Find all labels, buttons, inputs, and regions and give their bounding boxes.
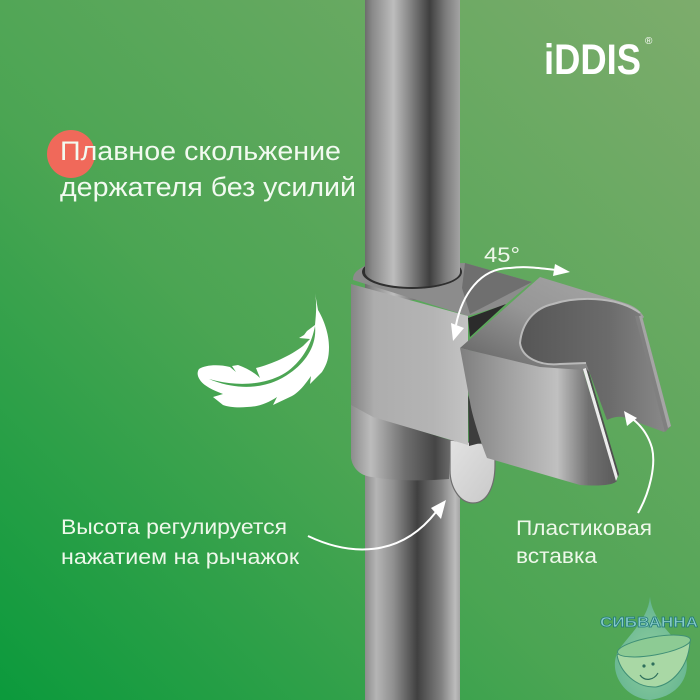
lower collar <box>351 400 450 480</box>
water drop <box>615 597 687 700</box>
heading with red accent circle: держателя без усилий <box>60 172 356 202</box>
holder opening inner wall <box>520 299 668 432</box>
lever <box>450 440 495 503</box>
arrow: to plastic insert <box>624 411 653 513</box>
label: height adjustment: нажатием на рычажок <box>61 545 300 569</box>
arrow: 45 degree rotation <box>451 264 570 341</box>
watermark: Sibvanna: СИБВАННА <box>600 614 698 631</box>
label: 45 degrees: 45° <box>484 244 520 267</box>
holder top surface <box>460 277 644 372</box>
holder front edge <box>583 368 618 481</box>
collar ring <box>362 255 462 289</box>
shower holder bracket <box>351 230 671 503</box>
label: height adjustment: Высота регулируется <box>61 515 287 539</box>
label: plastic insert: Пластиковая <box>516 516 652 540</box>
holder front face <box>460 348 617 486</box>
bathtub <box>617 638 690 687</box>
holder rim highlight <box>520 299 640 364</box>
label: height adjustment <box>61 515 300 569</box>
label: plastic insert: вставка <box>516 544 597 568</box>
logo: iDDIS: ® <box>645 36 653 47</box>
label: plastic insert <box>516 516 652 568</box>
watermark: Sibvanna <box>600 597 698 700</box>
front face of slider <box>351 284 468 445</box>
shadow between slider and holder <box>468 304 506 337</box>
top surface of slider <box>353 263 532 316</box>
icon: feather <box>198 293 329 407</box>
shower rail pole <box>365 0 460 700</box>
heading with red accent circle: Плавное скольжение <box>60 136 341 166</box>
accent circle <box>47 130 95 178</box>
logo: iDDIS: iDDIS <box>544 36 641 84</box>
heading with red accent circle <box>47 130 356 202</box>
arrow: to lever <box>308 500 446 549</box>
holder right flange <box>635 316 671 432</box>
